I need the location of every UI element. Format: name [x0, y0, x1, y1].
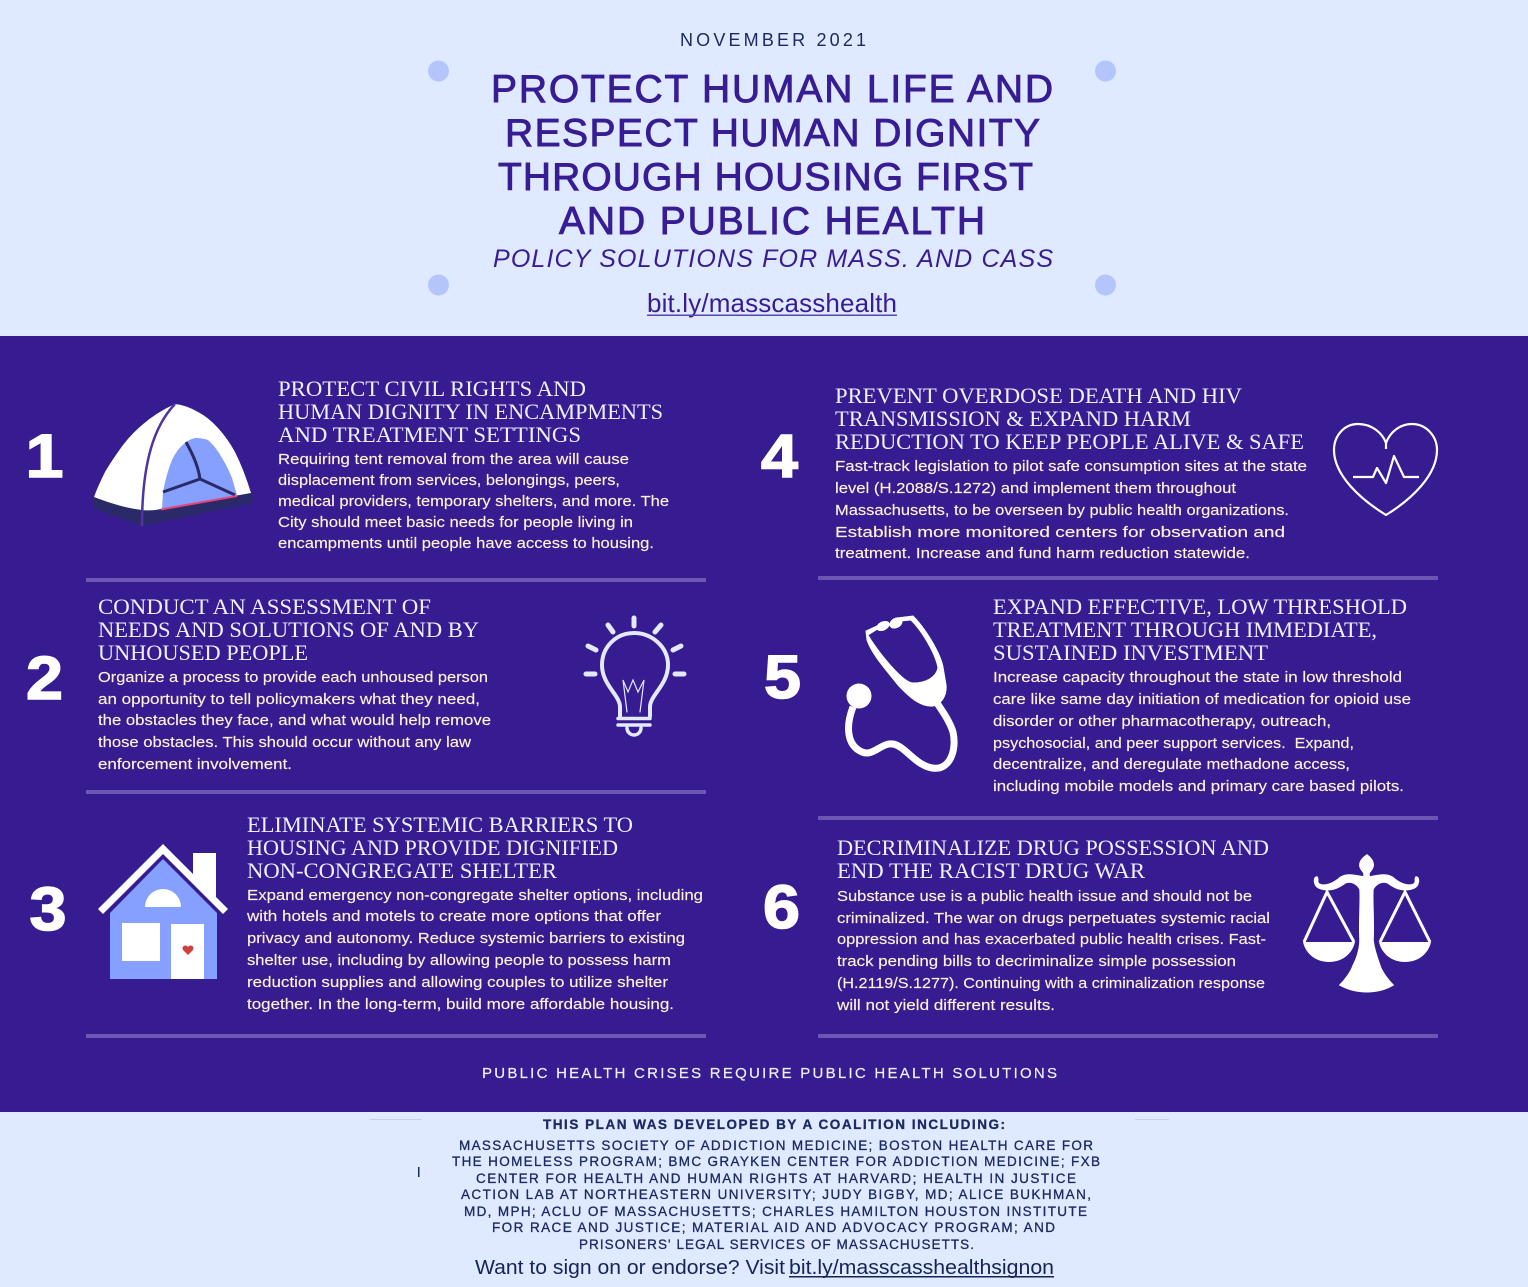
coalition list	[452, 1138, 1100, 1252]
heading: NON-CONGREGATE SHELTER	[247, 858, 557, 883]
date: NOVEMBER 2021	[680, 30, 866, 50]
panel: recommendation 2	[26, 594, 684, 773]
body text: decentralize, and deregulate methadone access,	[993, 756, 1350, 773]
icon: house	[98, 844, 228, 979]
body text: including mobile models and primary care based pilots.	[993, 778, 1404, 795]
dark content band	[0, 336, 1528, 1112]
body text	[835, 458, 1307, 562]
number 4: 4	[761, 422, 798, 490]
coalition list: MD, MPH; ACLU OF MASSACHUSETTS; CHARLES HAMILTON HOUSTON INSTITUTE	[464, 1204, 1087, 1219]
body text: criminalized. The war on drugs perpetuates systemic racial	[837, 910, 1270, 927]
icon: stethoscope	[846, 615, 954, 768]
body text: Increase capacity throughout the state in low threshold	[993, 669, 1402, 686]
body text: privacy and autonomy. Reduce systemic barriers to existing	[247, 930, 685, 947]
body text: (H.2119/S.1277). Continuing with a criminalization response	[837, 975, 1265, 992]
heading	[278, 376, 663, 447]
title	[491, 68, 1053, 243]
title: PROTECT HUMAN LIFE AND	[491, 68, 1053, 111]
body text: level (H.2088/S.1272) and implement them throughout	[835, 480, 1237, 497]
icon: tent	[93, 404, 253, 526]
heading: HUMAN DIGNITY IN ENCAMPMENTS	[278, 399, 663, 424]
heading: CONDUCT AN ASSESSMENT OF	[98, 594, 431, 619]
heading: ELIMINATE SYSTEMIC BARRIERS TO	[247, 812, 633, 837]
body text: Expand emergency non-congregate shelter options, including	[247, 887, 703, 904]
heading	[993, 594, 1407, 665]
body text: encampments until people have access to housing.	[278, 535, 654, 552]
coalition list: FOR RACE AND JUSTICE; MATERIAL AID AND ADVOCACY PROGRAM; AND	[492, 1220, 1055, 1235]
panel: recommendation 6	[763, 835, 1431, 1014]
body text: with hotels and motels to create more options that offer	[246, 908, 661, 925]
coalition list: ACTION LAB AT NORTHEASTERN UNIVERSITY; JUDY BIGBY, MD; ALICE BUKHMAN,	[461, 1187, 1091, 1202]
body text: treatment. Increase and fund harm reduction statewide.	[835, 545, 1250, 562]
heading: EXPAND EFFECTIVE, LOW THRESHOLD	[993, 594, 1407, 619]
body text: medical providers, temporary shelters, and more. The	[278, 493, 669, 510]
body text: enforcement involvement.	[98, 756, 292, 773]
icon: heart with pulse	[1334, 424, 1437, 515]
heading: END THE RACIST DRUG WAR	[837, 858, 1145, 883]
body text	[993, 669, 1411, 795]
number 5: 5	[764, 643, 801, 711]
heading: UNHOUSED PEOPLE	[98, 640, 308, 665]
coalition list: PRISONERS' LEGAL SERVICES OF MASSACHUSETTS.	[579, 1237, 974, 1252]
body text: Establish more monitored centers for observation and	[835, 524, 1285, 541]
heading: SUSTAINED INVESTMENT	[993, 640, 1269, 665]
body text: the obstacles they face, and what would help remove	[98, 712, 491, 729]
heading: TRANSMISSION & EXPAND HARM	[835, 406, 1191, 431]
heading	[837, 835, 1269, 883]
coalition list: CENTER FOR HEALTH AND HUMAN RIGHTS AT HARVARD; HEALTH IN JUSTICE	[476, 1171, 1076, 1186]
coalition list: MASSACHUSETTS SOCIETY OF ADDICTION MEDICINE; BOSTON HEALTH CARE FOR	[459, 1138, 1093, 1153]
body text: track pending bills to decriminalize simple possession	[837, 953, 1236, 970]
heading: HOUSING AND PROVIDE DIGNIFIED	[247, 835, 618, 860]
header	[428, 30, 1116, 318]
title: RESPECT HUMAN DIGNITY	[505, 112, 1040, 155]
body text	[278, 451, 669, 552]
body text: will not yield different results.	[836, 997, 1055, 1014]
body text: an opportunity to tell policymakers what they need,	[98, 691, 480, 708]
body text: Organize a process to provide each unhoused person	[98, 669, 488, 686]
heading: PREVENT OVERDOSE DEATH AND HIV	[835, 383, 1242, 408]
heading	[247, 812, 633, 883]
number 6: 6	[763, 873, 800, 941]
heading: NEEDS AND SOLUTIONS OF AND BY	[98, 617, 479, 642]
icon: light bulb	[586, 618, 684, 735]
body text: care like same day initiation of medication for opioid use	[993, 691, 1411, 708]
body text	[98, 669, 491, 773]
body text: psychosocial, and peer support services. Expand,	[993, 735, 1354, 752]
heading: AND TREATMENT SETTINGS	[278, 422, 581, 447]
heading: REDUCTION TO KEEP PEOPLE ALIVE & SAFE	[835, 429, 1304, 454]
icon: scales of justice	[1303, 855, 1431, 992]
number 3: 3	[30, 875, 66, 943]
body text	[836, 888, 1270, 1014]
coalition heading: THIS PLAN WAS DEVELOPED BY A COALITION INCLUDING:	[543, 1117, 1005, 1132]
footer	[370, 1117, 1169, 1279]
number 1: 1	[26, 422, 64, 490]
title: AND PUBLIC HEALTH	[559, 200, 985, 243]
number 2: 2	[26, 644, 63, 712]
panel: recommendation 3	[30, 812, 703, 1013]
body text: Massachusetts, to be overseen by public health organizations.	[835, 502, 1289, 519]
body text: Fast-track legislation to pilot safe consumption sites at the state	[835, 458, 1307, 475]
body text: shelter use, including by allowing people to possess harm	[247, 952, 671, 969]
decorative dots	[428, 60, 1116, 296]
body text: oppression and has exacerbated public health crises. Fast-	[837, 931, 1266, 948]
title: THROUGH HOUSING FIRST	[498, 156, 1033, 199]
panel: recommendation 1	[26, 376, 669, 552]
sign-on call to action: Want to sign on or endorse? Visit	[475, 1257, 785, 1279]
body text: City should meet basic needs for people living in	[278, 514, 633, 531]
heading: PROTECT CIVIL RIGHTS AND	[278, 376, 586, 401]
body text: those obstacles. This should occur without any law	[98, 734, 471, 751]
sign-on call to action	[475, 1257, 1054, 1279]
heading: TREATMENT THROUGH IMMEDIATE,	[993, 617, 1377, 642]
body text: Requiring tent removal from the area will cause	[278, 451, 629, 468]
body text: disorder or other pharmacotherapy, outreach,	[993, 713, 1331, 730]
slogan: PUBLIC HEALTH CRISES REQUIRE PUBLIC HEALTH SOLUTIONS	[482, 1065, 1057, 1082]
body text: reduction supplies and allowing couples to utilize shelter	[247, 974, 668, 991]
body text: together. In the long-term, build more affordable housing.	[247, 996, 674, 1013]
sign-on call to action: bit.ly/masscasshealthsignon	[789, 1257, 1054, 1279]
body text: Substance use is a public health issue and should not be	[837, 888, 1252, 905]
panel: recommendation 5	[764, 594, 1411, 795]
link: bit.ly/masscasshealth	[647, 288, 897, 318]
body text: displacement from services, belongings, peers,	[278, 472, 620, 489]
heading	[835, 383, 1304, 454]
subtitle: POLICY SOLUTIONS FOR MASS. AND CASS	[493, 245, 1053, 273]
body text	[246, 887, 703, 1013]
heading	[98, 594, 479, 665]
coalition list: THE HOMELESS PROGRAM; BMC GRAYKEN CENTER FOR ADDICTION MEDICINE; FXB	[452, 1154, 1100, 1169]
heading: DECRIMINALIZE DRUG POSSESSION AND	[837, 835, 1269, 860]
panel: recommendation 4	[761, 383, 1437, 562]
